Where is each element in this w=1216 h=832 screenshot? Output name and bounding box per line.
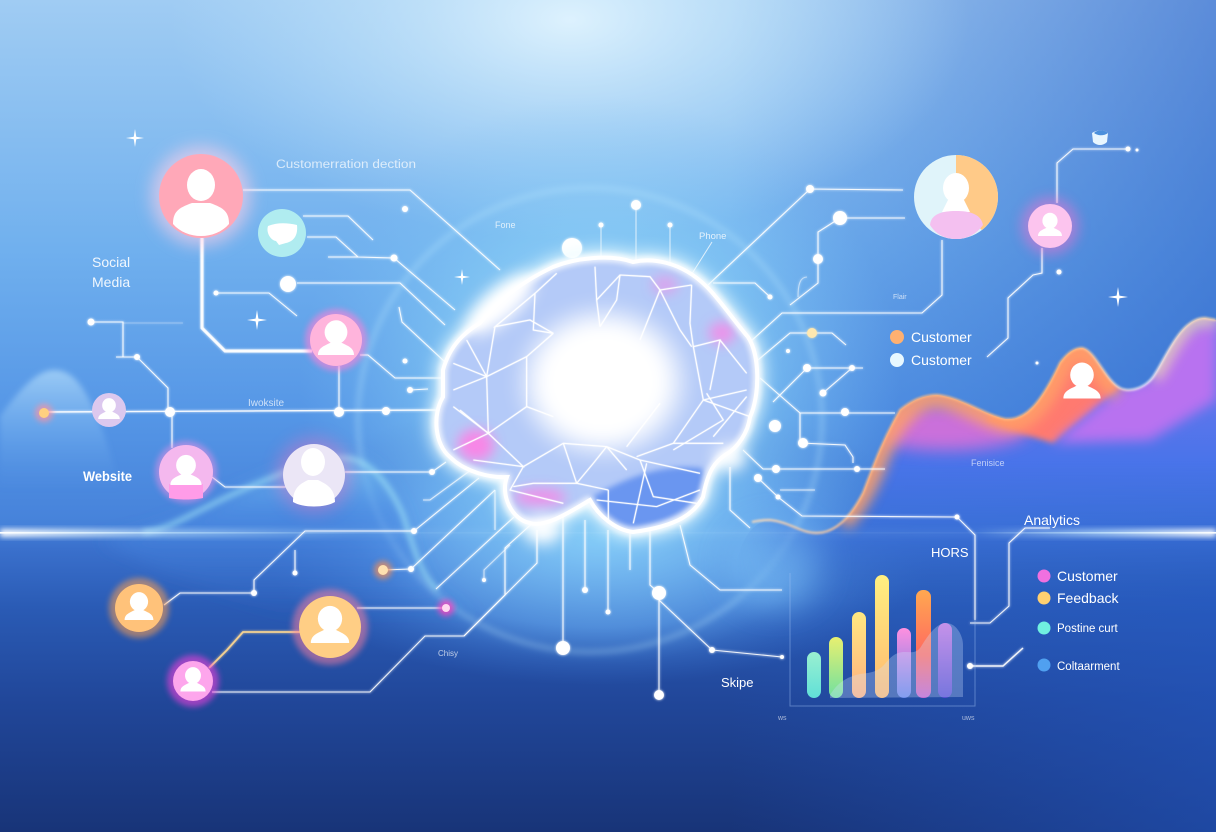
label: social media: Social: [92, 254, 130, 270]
avatar: social pink: [151, 146, 251, 246]
chart: hours bars: [790, 573, 975, 706]
avatar: two-tone top right: [914, 155, 998, 239]
icon: chat bubble: [258, 209, 306, 257]
top right light edge: [1153, 318, 1216, 377]
chart axis label right: uws: [962, 715, 975, 722]
label: flair: Flair: [893, 294, 907, 301]
area overlay: [830, 623, 963, 698]
avatar: pink centre left: [305, 309, 367, 371]
label: fenisice: Fenisice: [971, 458, 1005, 468]
salmon crest: [985, 340, 1120, 443]
circuit nodes: [88, 146, 1138, 700]
right wave edge highlight: [752, 318, 1216, 533]
vertical lines above brain: [601, 205, 712, 280]
legend: customer top right: Customer: [911, 352, 972, 368]
glowing upper left lobe: [458, 266, 542, 344]
legend: analytics: Customer: [1057, 568, 1118, 584]
circuit lines: [42, 149, 1128, 695]
brain: [436, 258, 757, 544]
legend: analytics: Coltaarment: [1057, 661, 1120, 673]
pink brain highlights: [458, 276, 735, 506]
label: skipe: Skipe: [721, 675, 754, 690]
avatar: pink top right: [1021, 197, 1079, 255]
avatar: website pink: [155, 441, 217, 503]
node: orange left: [35, 404, 53, 422]
avatar: small pale pink: [92, 393, 126, 427]
top center glow: [170, 0, 970, 240]
lower central glow: [260, 395, 940, 685]
purple right band: [1053, 320, 1216, 443]
chart axes: [790, 573, 975, 706]
avatar: orange small: [109, 578, 169, 638]
right wave: [755, 318, 1216, 580]
sparkles: [126, 129, 1128, 330]
brain outline: [436, 258, 757, 532]
halo ring: [358, 188, 822, 652]
legend: analytics: [1038, 568, 1120, 673]
label: chisy: Chisy: [438, 649, 458, 658]
legend: analytics: Feedback: [1057, 590, 1119, 606]
brain outer glow: [436, 258, 757, 532]
legend: customer top right: Customer: [911, 329, 972, 345]
brain body: [436, 258, 757, 532]
label: analytics: Analytics: [1024, 512, 1080, 528]
legend: customer top right: [890, 329, 972, 368]
label: fone: Fone: [495, 220, 516, 230]
glowing node: orange: [374, 561, 392, 579]
left ridge wave: [100, 458, 530, 640]
icon: small chat top right: [1092, 130, 1108, 145]
label: website small: Iwoksite: [248, 398, 285, 409]
label: phone: Phone: [699, 231, 726, 242]
brain glowing core: [511, 300, 695, 464]
glowing lower highlights: [525, 446, 746, 544]
avatar: pale large: [276, 437, 352, 513]
lower lobe shade: [590, 467, 704, 530]
pink band under first crest: [860, 406, 1030, 450]
labels: [83, 159, 1080, 722]
avatar: orange large: [292, 589, 368, 665]
right wave lower left light area: [730, 525, 820, 605]
neural mesh: [453, 267, 750, 523]
bars: [807, 575, 952, 698]
central halo around brain: [300, 95, 900, 665]
left hump wave: [0, 370, 120, 490]
glowing node: pink: [438, 600, 454, 616]
label: customer interaction: Customerration dection: [276, 159, 416, 171]
orange edge glow: [840, 348, 1120, 520]
right wave body: [755, 318, 1216, 580]
left ridge highlight: [143, 458, 438, 590]
label: media: Media: [92, 274, 130, 290]
chart axis label left: ws: [777, 715, 787, 722]
avatar: magenta small: [167, 655, 219, 707]
avatar: on right wave: [1063, 363, 1101, 398]
horizon light line: [0, 529, 1216, 537]
label: website: Website: [83, 468, 132, 484]
legend: analytics: Postine curt: [1057, 623, 1119, 635]
label: hors: HORS: [931, 545, 969, 560]
